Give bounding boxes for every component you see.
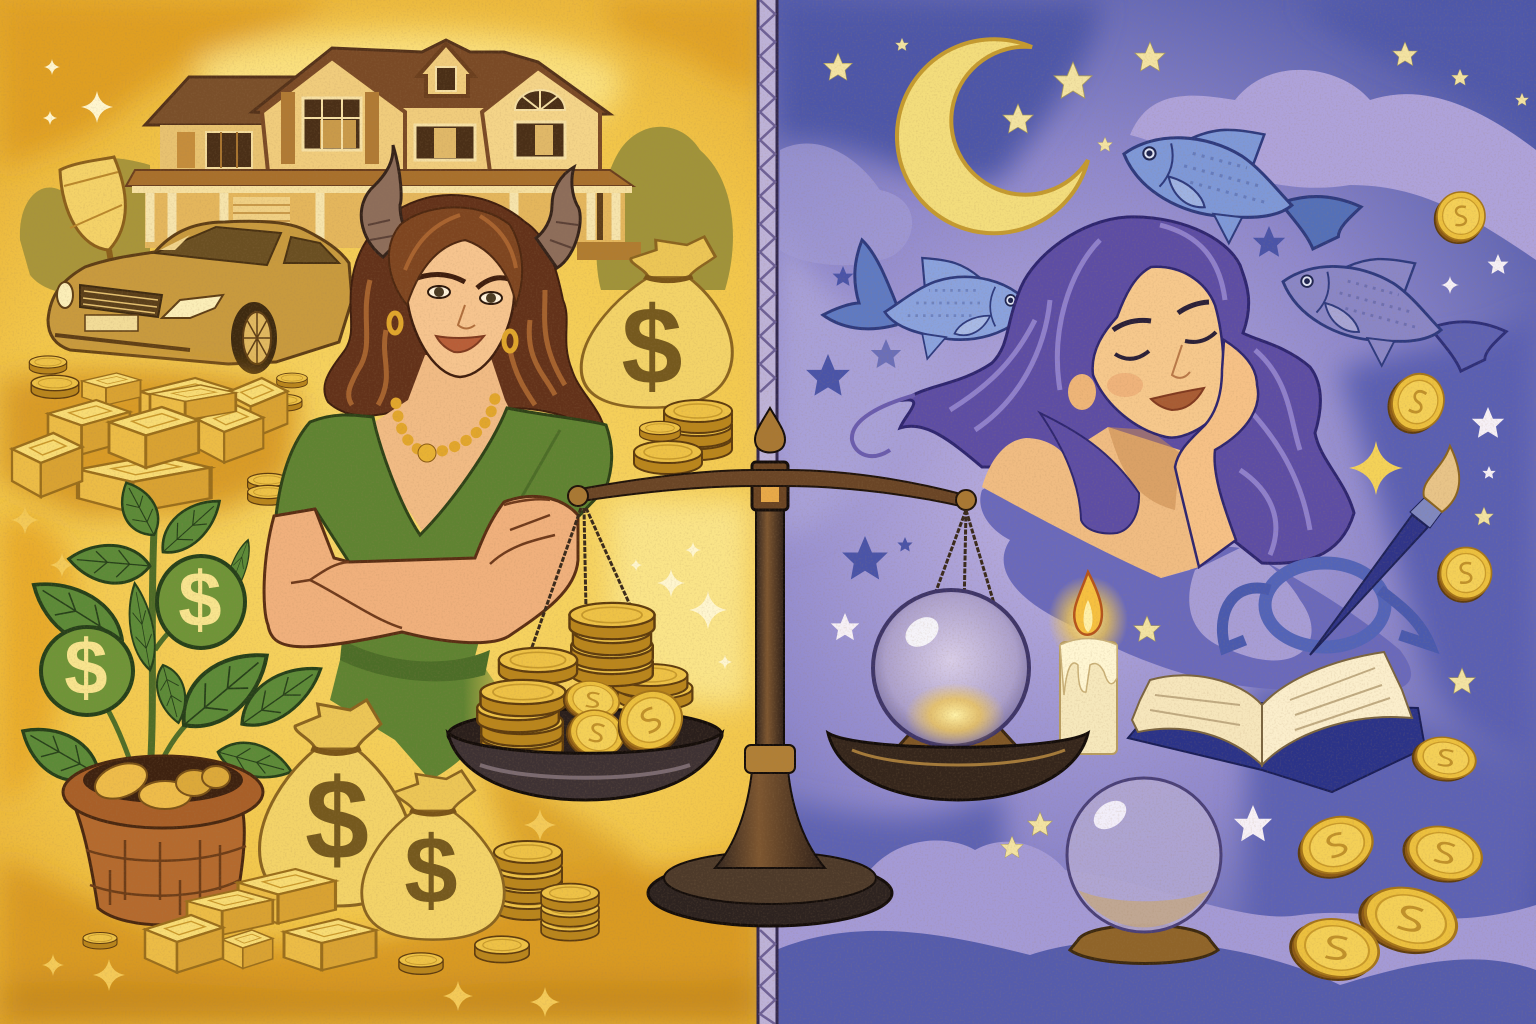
fish: left (823, 240, 1031, 359)
sparkles: gold side (43, 59, 732, 669)
paintbrush (1310, 446, 1459, 655)
money bag: top right (575, 237, 749, 408)
car (48, 221, 352, 374)
base (648, 770, 892, 926)
panel: gold Taurus background (0, 0, 760, 1024)
coin stacks: lower (83, 841, 599, 974)
moon (897, 39, 1088, 233)
Taurus woman (264, 145, 612, 780)
left pan back (448, 709, 722, 761)
pillar (756, 500, 784, 765)
main roof (252, 40, 610, 118)
gold star (1349, 441, 1403, 495)
champagne glass (60, 157, 125, 262)
white stars (831, 254, 1508, 841)
windows (436, 67, 456, 91)
money bag: top right: $ (621, 285, 683, 408)
fish: right (1269, 232, 1517, 395)
house (126, 40, 641, 260)
crossed arms (264, 496, 578, 647)
earrings (389, 313, 516, 351)
Pisces woman (852, 217, 1354, 578)
blue stars (806, 226, 1285, 579)
money bag: front: $ (404, 817, 458, 924)
front hair (389, 207, 522, 305)
lower clouds (776, 840, 1536, 1024)
brick basket (63, 756, 263, 925)
pearl necklace (396, 398, 495, 462)
divider: braided band (757, 0, 778, 1024)
money bag: lower left: $ (305, 756, 369, 884)
face (1093, 267, 1224, 438)
money bag: front (362, 771, 504, 940)
money bag: lower left (260, 700, 412, 906)
green dress (276, 408, 612, 562)
plant with dollar coins: $ (178, 555, 222, 643)
horns (361, 145, 580, 268)
hair over shoulder (1040, 413, 1139, 533)
panel: indigo Pisces background (776, 0, 1536, 1024)
scattered coins (1286, 192, 1492, 987)
open book (1128, 652, 1425, 792)
plant with dollar coins (12, 476, 331, 794)
paint ribbon swirl (1222, 563, 1430, 648)
neck and chest (370, 355, 515, 535)
coin pile on left pan (477, 603, 693, 765)
flowing hair (900, 217, 1354, 570)
walls (400, 108, 495, 172)
chains (531, 508, 1005, 650)
plant with dollar coins: $ (64, 623, 108, 711)
gold brick pile (0, 356, 307, 515)
crystal ball on right pan (873, 590, 1029, 750)
left clouds (780, 144, 912, 265)
left wing (145, 77, 300, 125)
faint gold sparkles (11, 506, 560, 1017)
fish: top (1109, 101, 1373, 274)
gold bars (145, 869, 376, 973)
cloud band below Pisces woman (980, 482, 1411, 694)
finial (755, 408, 785, 452)
hair back (324, 195, 607, 442)
coin stacks: top right (634, 400, 732, 474)
right pan (828, 733, 1088, 800)
trees behind house (20, 127, 733, 294)
crystal ball: lower (1067, 778, 1221, 964)
balance scale (531, 408, 1005, 926)
candle (1048, 572, 1128, 754)
top-right clouds (1130, 70, 1536, 260)
porch (126, 170, 633, 186)
hand on cheek (1175, 340, 1258, 567)
face (407, 240, 514, 377)
beam (575, 470, 965, 507)
shoulder and chest (982, 427, 1199, 578)
left pan (448, 733, 722, 800)
stars (824, 38, 1529, 858)
